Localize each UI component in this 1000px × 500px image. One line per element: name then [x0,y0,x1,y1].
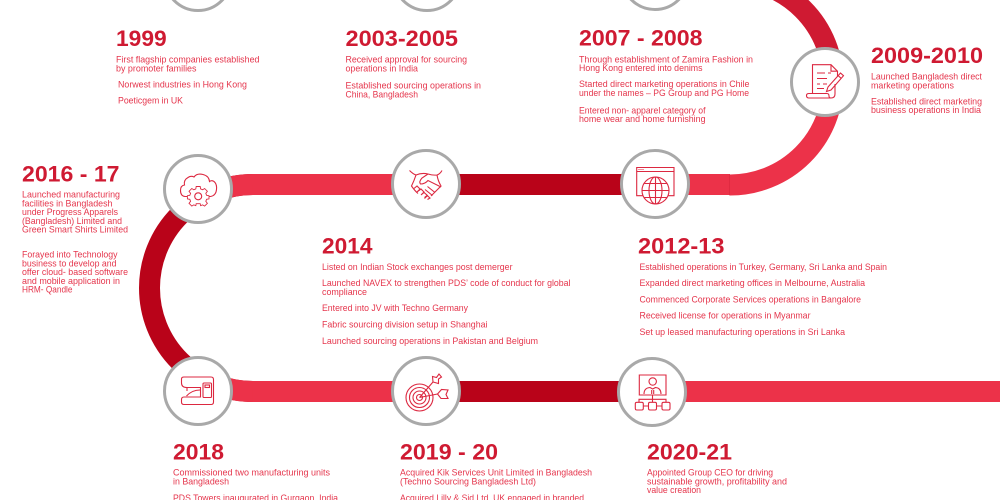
text block: 2019-20 [400,440,592,500]
text block: 2020-21: value creation [647,485,701,495]
text block: 2009-2010: business operations in India [871,105,982,115]
node: 2019-20 target with arrows icon [392,358,460,424]
node: 2020-21 leadership hierarchy icon [618,358,686,426]
text block: 1999: First flagship companies established [116,55,260,65]
node: 1999 (cropped circle) [164,0,232,10]
text block: 2018: Commissioned two manufacturing units [173,468,330,478]
text block: 2012-13: Expanded direct marketing offices in Melbourne, Australia [640,278,866,288]
text block: 2012-13: Set up leased manufacturing operations in Sri Lanka [640,327,846,337]
text block: 2018 [173,440,339,500]
text block: 2020-21 [647,440,787,495]
timeline track [150,0,1000,392]
node: 2018 sewing machine icon [164,358,232,424]
text block: 2007-2008: Through establishment of Zamira Fashion in [579,54,753,64]
text block: 2016-17: Green Smart Shirts Limited [22,224,128,234]
text block: 2016-17: (Bangladesh) Limited and [22,216,122,226]
text block: 2014: Fabric sourcing division setup in Shanghai [322,320,488,330]
text block: 2016-17 [22,162,128,294]
text block: 2016-17: Forayed into Technology [22,250,118,260]
text block: 2016-17: Launched manufacturing [22,190,120,200]
node: 2012-13 globe window icon [622,150,688,218]
text block: 2019-20: Acquired Kik Services Unit Limited in Bangladesh [400,468,592,478]
text block: 2007-2008: Started direct marketing operations in Chile [579,79,750,89]
text block: 2016-17: offer cloud- based software [22,267,128,277]
text block: 2018: in Bangladesh [173,476,229,486]
text block: 2012-13 [638,234,887,337]
text block: 2014: Launched NAVEX to strengthen PDS’ code of conduct for global [322,278,570,288]
text block: 2009-2010: 2009-2010 [871,43,983,68]
text block: 2003-2005: 2003-2005 [346,26,458,51]
text block: 2007-2008 [579,26,753,124]
text block: 2009-2010: marketing operations [871,80,954,90]
text block: 2014: 2014 [322,234,373,258]
text block: 2020-21: sustainable growth, profitability and [647,476,787,486]
text block: 2014: Listed on Indian Stock exchanges post demerger [322,262,512,272]
text block: 1999: Poeticgem in UK [118,96,184,106]
text block: 2009-2010 [871,43,983,115]
text block: 2009-2010: Established direct marketing [871,96,982,106]
text block: 2016-17: HRM- Qandle [22,284,72,294]
text block: 2014: Launched sourcing operations in Pakistan and Belgium [322,336,538,346]
text block: 2019-20: 2019 - 20 [400,440,498,464]
text block: 2016-17: facilities in Bangladesh [22,198,112,208]
text block: 1999 [116,26,260,106]
node: 2007-2008 (cropped circle) [622,0,688,10]
text block: 2020-21: 2020-21 [647,440,732,464]
text block: 2003-2005: operations in India [346,63,419,73]
text block: 2003-2005: China, Bangladesh [346,90,418,100]
text block: 2016-17: and mobile application in [22,276,120,286]
text block: 2012-13: Established operations in Turkey, Germany, Sri Lanka and Spain [640,262,887,272]
text block: 2014: Entered into JV with Techno Germany [322,303,468,313]
text block: 2012-13: 2012-13 [638,234,724,258]
text block: 1999: by promoter families [116,63,197,73]
text block: 2012-13: Received license for operations in Myanmar [640,310,810,320]
text block: 2007-2008: under the names – PG Group and PG Home [579,88,749,98]
text block: 2016-17: business to develop and [22,258,116,268]
text block: 1999: Norwest industries in Hong Kong [118,80,247,90]
text block: 2009-2010: Launched Bangladesh direct [871,72,982,82]
text block: 2016-17: 2016 - 17 [22,162,120,186]
node: 2016-17 cloud and gear icon [164,156,232,222]
node: 2014 handshake icon [392,150,460,218]
text block: 2007-2008: Hong Kong entered into denims [579,63,703,73]
node: 2009-2010 document icon [792,48,858,116]
node: 2003-2005 (cropped circle) [394,0,460,10]
text block: 2014 [322,234,570,346]
text block: 2012-13: Commenced Corporate Services operations in Bangalore [640,294,861,304]
text block: 2007-2008: home wear and home furnishing [579,114,706,124]
text block: 1999: 1999 [116,26,167,51]
text block: 2016-17: under Progress Apparels [22,207,118,217]
text block: 2014: compliance [322,287,367,297]
text block: 2003-2005: Received approval for sourcing [346,55,467,65]
text block: 2020-21: Appointed Group CEO for driving [647,468,773,478]
text block: 2019-20: (Techno Sourcing Bangladesh Ltd) [400,476,536,486]
text block: 2003-2005: Established sourcing operations in [346,81,481,91]
text block: 2007-2008: Entered non- apparel category of [579,106,706,116]
text block: 2003-2005 [346,26,481,100]
text block: 2018: 2018 [173,440,224,464]
text block: 2007-2008: 2007 - 2008 [579,26,702,50]
